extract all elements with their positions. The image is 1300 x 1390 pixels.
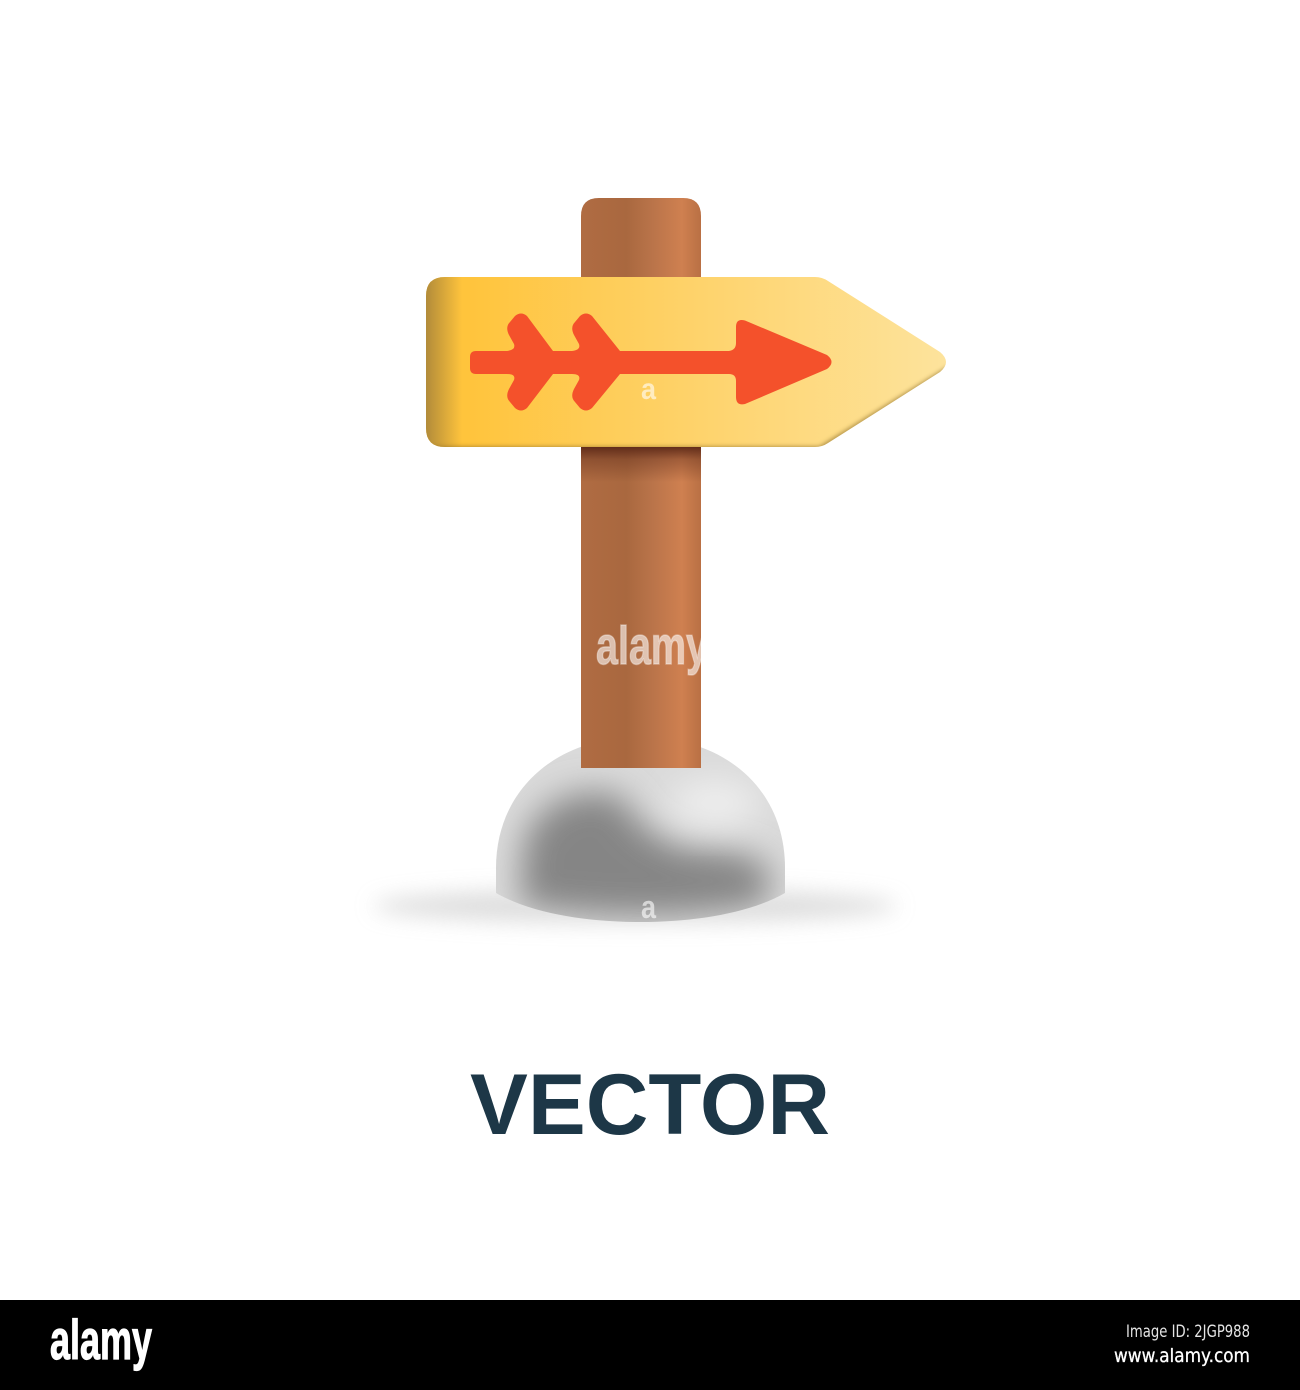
watermark: centre logo: alamy <box>596 616 708 676</box>
watermark: small a on sign: a <box>641 373 656 406</box>
stone base <box>496 747 785 922</box>
watermark: small a on base: a <box>641 889 656 925</box>
icon: red arrow <box>470 314 832 410</box>
wooden post <box>581 198 701 768</box>
title: VECTOR <box>470 1057 830 1153</box>
image id: Image ID: 2JGP988 <box>1126 1322 1250 1342</box>
website: www.alamy.com <box>1114 1345 1250 1367</box>
footer logo: alamy <box>50 1308 152 1371</box>
sign board <box>426 277 950 449</box>
icon: signpost <box>373 198 950 925</box>
footer bar <box>0 1300 1300 1390</box>
ground shadow <box>373 889 897 923</box>
